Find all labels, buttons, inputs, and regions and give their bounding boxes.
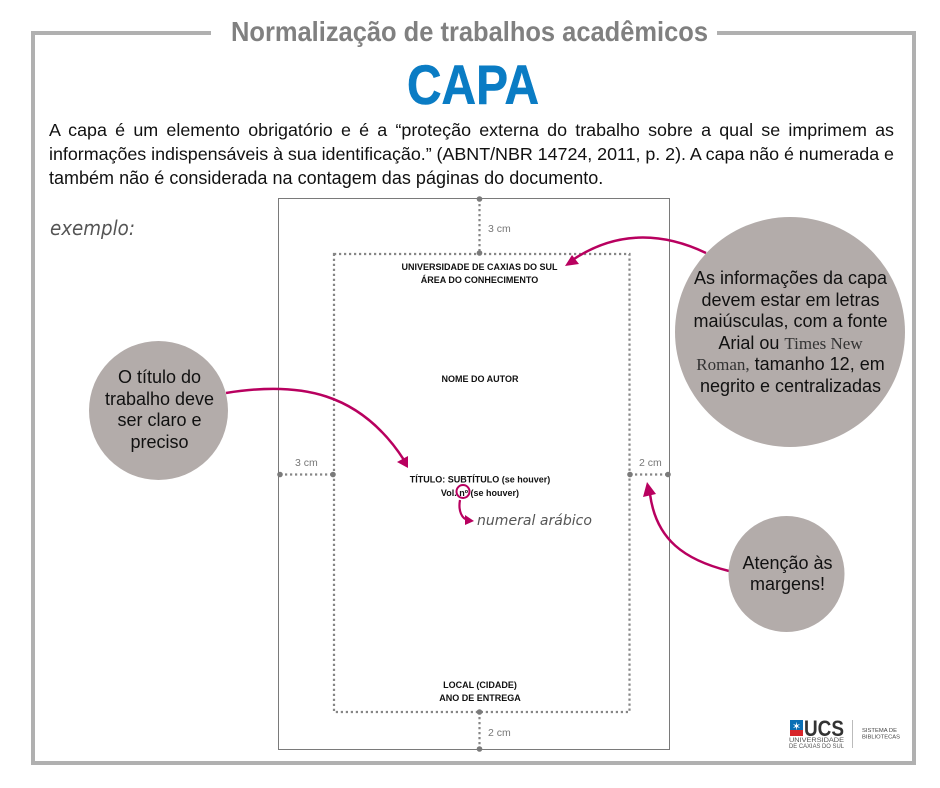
callout: letters: negrito e centralizadas	[700, 376, 881, 396]
margin labels: 2 cm	[488, 727, 511, 739]
intro paragraph	[49, 120, 894, 188]
intro paragraph: também não é considerada na contagem das páginas do documento.	[49, 168, 603, 188]
logo: UCS: UCS	[804, 716, 844, 741]
heading: Normalização de trabalhos acadêmicos	[231, 16, 708, 47]
callout: letters	[675, 217, 905, 447]
page text	[401, 262, 558, 703]
document page	[277, 196, 671, 752]
margin guides	[280, 199, 668, 749]
page text: UNIVERSIDADE DE CAXIAS DO SUL	[401, 262, 558, 272]
intro paragraph: A capa é um elemento obrigatório e é a “proteção externa do trabalho sobre a qual se imprimem as	[49, 120, 894, 140]
page text: TÍTULO: SUBTÍTULO (se houver)	[410, 474, 550, 484]
callout: letters: As informações da capa	[694, 268, 888, 288]
page text: NOME DO AUTOR	[441, 374, 519, 384]
margin labels: 3 cm	[488, 223, 511, 235]
logo: UCS: BIBLIOTECAS	[862, 734, 900, 740]
logo shield: ✶	[792, 721, 801, 733]
example label: exemplo:	[50, 216, 135, 240]
arrow: margins note to margin	[643, 482, 729, 571]
margin labels: 3 cm	[295, 457, 318, 469]
callout: title: ser claro e	[117, 410, 202, 430]
logo: UCS: SISTEMA DE	[862, 728, 897, 734]
callout: letters: Arial ou Times New	[718, 333, 863, 353]
callout: letters: maiúsculas, com a fonte	[693, 311, 888, 331]
intro paragraph: informações indispensáveis à sua identificação.” (ABNT/NBR 14724, 2011, p. 2). A capa não é numerada e	[49, 144, 894, 164]
title: CAPA: CAPA	[407, 53, 539, 116]
margin labels: 2 cm	[639, 457, 662, 469]
margin labels	[295, 223, 662, 739]
margin end dots	[277, 196, 671, 752]
logo: UCS: DE CAXIAS DO SUL	[789, 743, 845, 750]
page text: ANO DE ENTREGA	[439, 693, 521, 703]
logo: UCS: UNIVERSIDADE	[789, 737, 844, 744]
callout: margins: margens!	[750, 574, 825, 594]
callout: margins: Atenção às	[742, 553, 833, 573]
logo: UCS	[789, 716, 900, 750]
callout: margins	[728, 516, 844, 632]
callout: title	[89, 341, 228, 480]
arrow: letters note to header	[565, 238, 706, 266]
highlight ring on nº	[456, 485, 470, 498]
callout: letters: devem estar em letras	[701, 290, 880, 310]
numeral note: numeral arábico	[477, 513, 592, 529]
arrow: title note to title	[226, 389, 408, 468]
small arrow to numeral note	[459, 500, 474, 525]
page text: ÁREA DO CONHECIMENTO	[421, 275, 538, 285]
page text: Vol. nº (se houver)	[441, 488, 519, 498]
callout: letters: Roman, tamanho 12, em	[696, 354, 885, 374]
callout: title: O título do	[118, 367, 201, 387]
callout: title: trabalho deve	[105, 389, 214, 409]
page text: LOCAL (CIDADE)	[443, 680, 517, 690]
callout: title: preciso	[130, 432, 189, 452]
